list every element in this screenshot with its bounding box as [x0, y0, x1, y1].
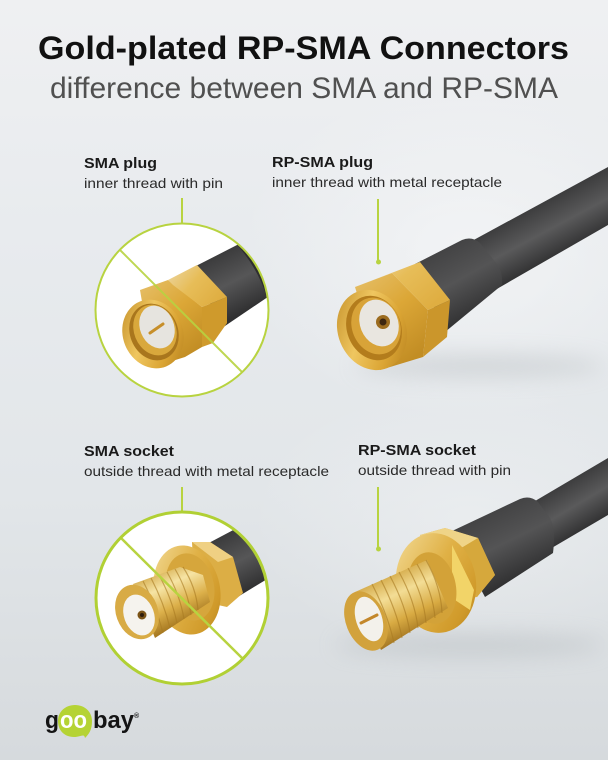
connector shadow: [355, 355, 605, 377]
label: SMA plug: SMA plug: [84, 155, 157, 172]
label: RP-SMA socket: outside thread with pin: [358, 462, 511, 478]
pointer line with dot: [376, 199, 381, 264]
panel: SMA plug: [84, 157, 270, 398]
pointer line: [181, 198, 183, 223]
logo: goobay: [45, 705, 140, 738]
label: SMA plug: inner thread with pin: [84, 175, 223, 191]
panel: RP-SMA plug: [272, 154, 608, 381]
panel: SMA socket: [84, 443, 329, 685]
pointer line with dot: [376, 487, 381, 552]
title: Gold-plated RP-SMA Connectors: [38, 30, 569, 66]
subtitle: difference between SMA and RP-SMA: [50, 72, 558, 105]
label: SMA socket: SMA socket: [84, 443, 174, 460]
pointer line: [181, 487, 183, 512]
label: SMA socket: [84, 443, 329, 479]
logo lettering: ®: [134, 712, 140, 720]
panel: RP-SMA socket: [335, 442, 608, 657]
label: RP-SMA plug: RP-SMA plug: [272, 154, 373, 171]
connector shadow: [335, 634, 605, 656]
RP-SMA socket connector and cable: [336, 458, 608, 657]
crossed-out circle with SMA socket connector: [94, 510, 270, 686]
label: SMA plug: [84, 155, 223, 191]
label: RP-SMA plug: inner thread with metal receptacle: [272, 174, 502, 190]
RP-SMA plug connector and cable: [325, 167, 608, 381]
logo lettering: [45, 707, 140, 734]
label: RP-SMA socket: [358, 442, 511, 478]
logo lettering: oo: [60, 707, 87, 734]
label: RP-SMA plug: [272, 154, 502, 190]
crossed-out circle with SMA plug connector: [94, 222, 270, 398]
logo bubble: [58, 705, 92, 738]
label: SMA socket: outside thread with metal receptacle: [84, 463, 329, 479]
label: RP-SMA socket: RP-SMA socket: [358, 442, 476, 459]
logo lettering: g: [45, 707, 59, 734]
logo lettering: bay: [93, 707, 135, 734]
